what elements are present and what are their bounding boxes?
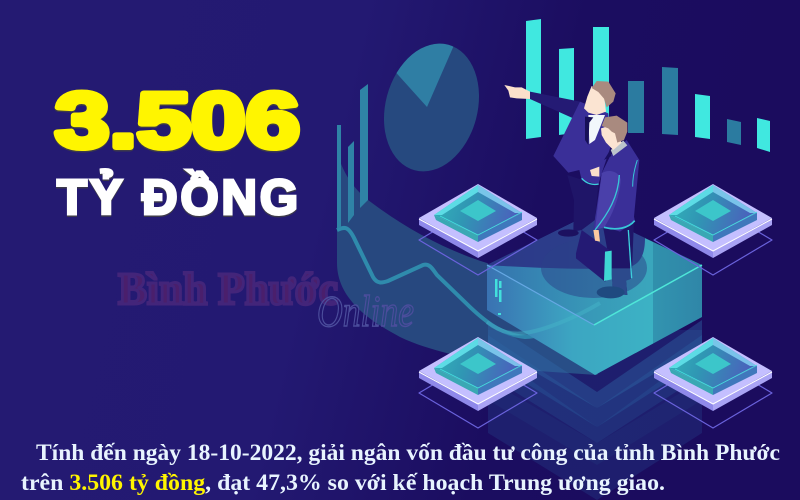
platform shadow: [487, 213, 645, 269]
platform top: [487, 213, 702, 325]
chip: lower left: [419, 337, 537, 428]
description line 2: trên 3.506 tỷ đồng, đạt 47,3% so với kế hoạch Trung ương giao.: [21, 470, 665, 496]
watermark name: Bình Phước: [118, 263, 338, 314]
lower legs in shade: [611, 268, 632, 295]
faded left bars: [337, 84, 368, 229]
big figure title: [55, 76, 300, 226]
amount: 3.506: [55, 76, 300, 164]
briefcase: [576, 230, 612, 282]
background wave line: [337, 228, 567, 337]
man shadow circle: [541, 238, 647, 298]
watermark: [118, 263, 414, 336]
isometric platform: [487, 213, 702, 500]
description line 1: Tính đến ngày 18-10-2022, giải ngân vốn đầu tư công của tỉnh Bình Phước: [36, 440, 780, 466]
platform edges: [487, 265, 594, 325]
unit shadow: TỶ ĐỒNG: [57, 172, 298, 226]
man pointing: [504, 81, 616, 237]
two businessmen: [504, 81, 639, 298]
lower faded layers: [488, 320, 702, 500]
curved chart backdrop: [337, 153, 620, 375]
unit: TỶ ĐỒNG: [57, 170, 298, 225]
pie chart: [384, 44, 479, 172]
chip: upper right: [654, 184, 772, 275]
amount shadow: 3.506: [55, 78, 300, 166]
chip: lower right: [654, 337, 772, 428]
translucent wave ribbon: [487, 303, 600, 334]
bar chart: [526, 19, 770, 152]
indicator lights: [495, 279, 502, 315]
chip: upper left: [419, 184, 537, 275]
man with briefcase: [576, 116, 639, 298]
platform front: [487, 265, 702, 375]
watermark online: Online: [317, 287, 414, 336]
description text: [21, 440, 780, 496]
